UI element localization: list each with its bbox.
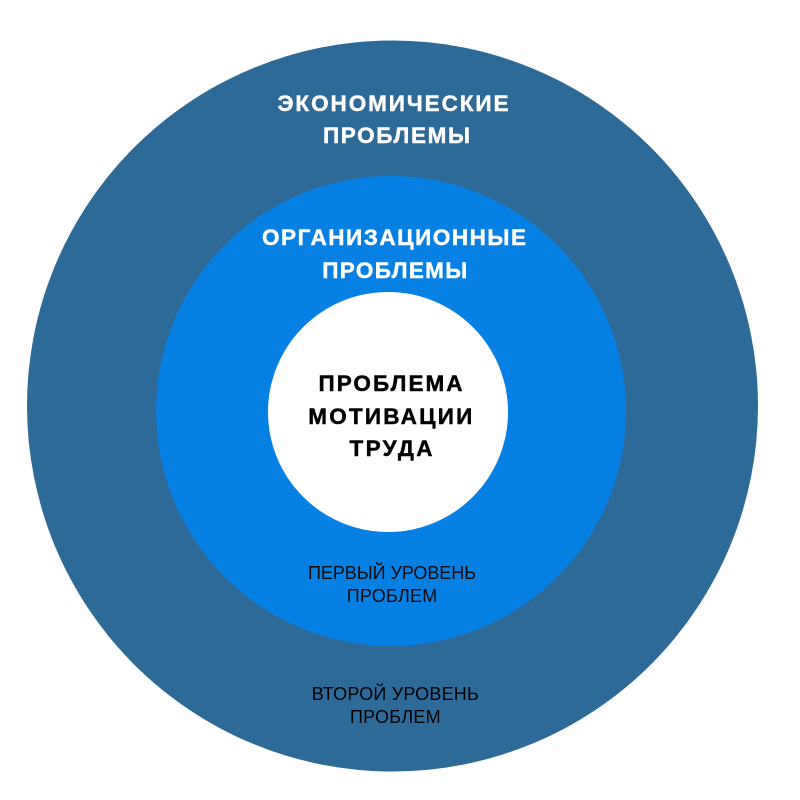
heading: organizational problems: ОРГАНИЗАЦИОННЫЕ: [262, 225, 526, 250]
heading: organizational problems: [262, 225, 526, 283]
heading: economic problems: [278, 91, 508, 148]
text: first level of problems: ПЕРВЫЙ УРОВЕНЬ: [308, 562, 476, 583]
heading: labour motivation problem: МОТИВАЦИИ: [308, 404, 472, 429]
text: first level of problems: ПРОБЛЕМ: [347, 586, 437, 606]
text: second level of problems: ВТОРОЙ УРОВЕНЬ: [312, 683, 479, 704]
heading: labour motivation problem: [308, 371, 472, 461]
text: second level of problems: ПРОБЛЕМ: [350, 707, 441, 727]
heading: labour motivation problem: ПРОБЛЕМА: [318, 371, 462, 396]
heading: economic problems: ЭКОНОМИЧЕСКИЕ: [278, 91, 508, 116]
heading: labour motivation problem: ТРУДА: [350, 436, 432, 461]
panel: inner circle labour motivation: [268, 292, 508, 532]
text: first level of problems: [308, 562, 476, 606]
heading: organizational problems: ПРОБЛЕМЫ: [322, 258, 467, 283]
text: second level of problems: [312, 683, 479, 727]
panel: middle circle organizational problems: [156, 176, 626, 646]
heading: economic problems: ПРОБЛЕМЫ: [323, 123, 470, 148]
